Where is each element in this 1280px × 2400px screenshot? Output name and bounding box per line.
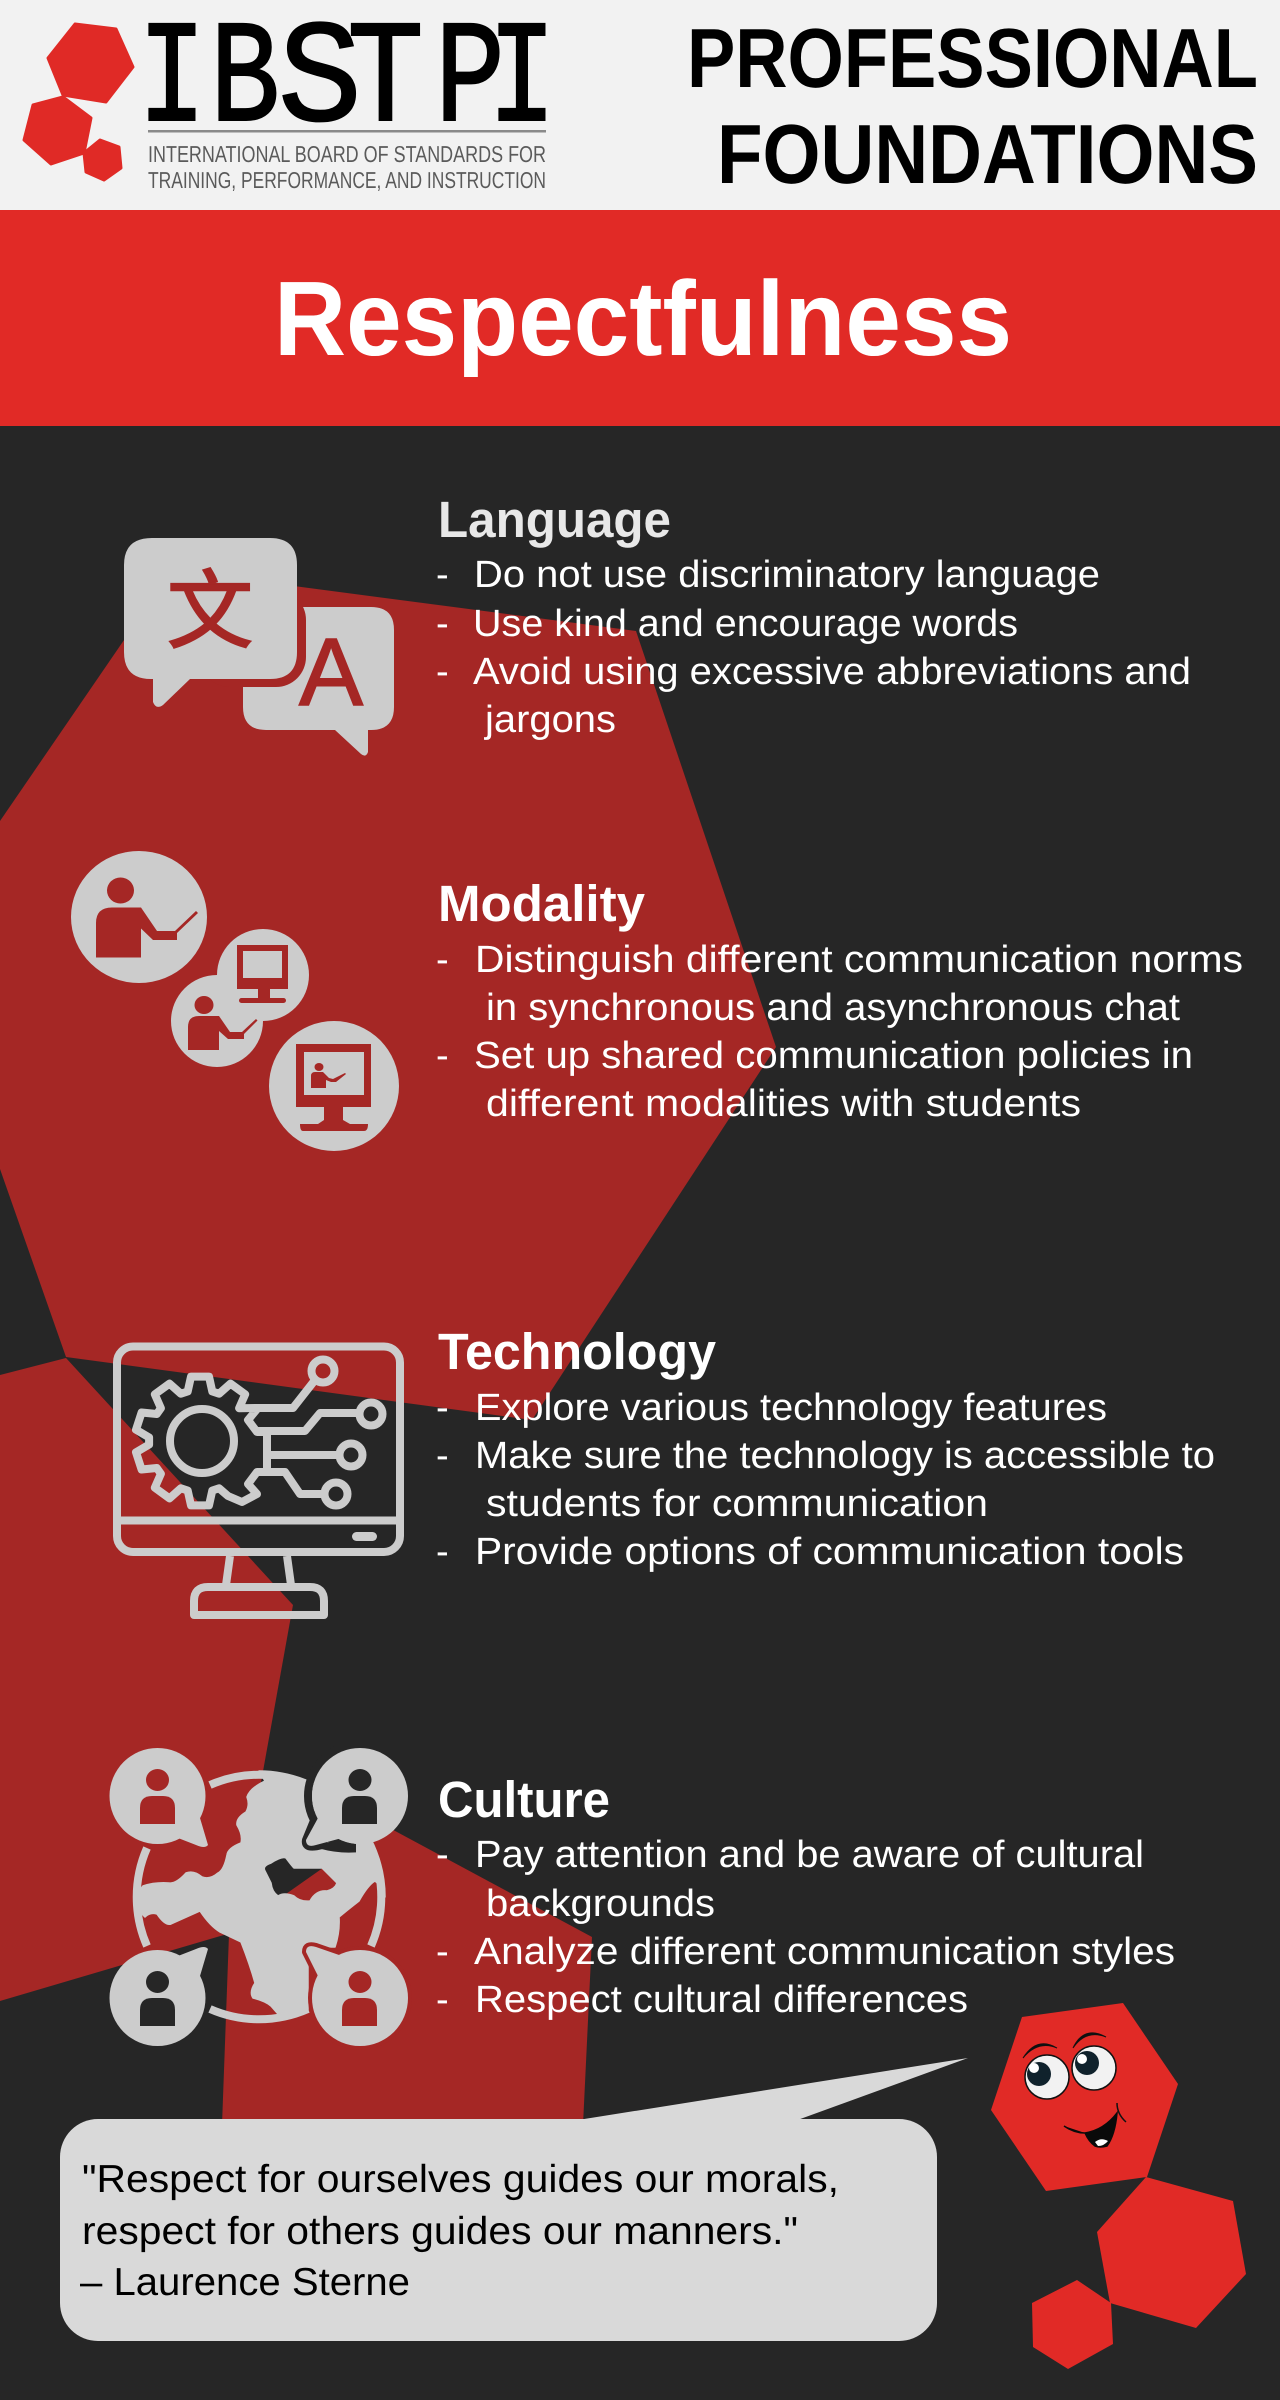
bullet list: -	[436, 1387, 449, 1429]
logo wordmark: I	[488, 0, 556, 164]
bullet list: backgrounds	[486, 1883, 715, 1925]
monitor	[237, 945, 288, 1003]
bullet list: Provide options of communication tools	[475, 1531, 1184, 1573]
series title	[687, 11, 1258, 201]
monitor	[117, 1346, 400, 1552]
icon: technology monitor with gear circuit	[117, 1346, 400, 1615]
bullet list: in synchronous and asynchronous chat	[486, 987, 1180, 1029]
globe ring	[137, 1775, 381, 2019]
bullet list: different modalities with students	[486, 1083, 1081, 1125]
mascot hexagons	[991, 2003, 1246, 2369]
bullet list: Analyze different communication styles	[474, 1931, 1175, 1973]
bullet list: -	[436, 554, 449, 596]
logo wordmark	[138, 0, 556, 164]
heading: Culture	[438, 1771, 610, 1828]
person bubble bottom left	[110, 1947, 208, 2046]
section: language	[436, 491, 1191, 741]
icon: language translation bubbles: A	[299, 619, 363, 726]
logo tagline	[148, 141, 546, 193]
bullet list: -	[436, 651, 449, 693]
mascot face	[1023, 2033, 1126, 2147]
bullet list: -	[436, 1931, 449, 1973]
quote text: – Laurence Sterne	[80, 2261, 410, 2304]
bullet list: Make sure the technology is accessible to	[475, 1435, 1215, 1477]
logo tagline: INTERNATIONAL BOARD OF STANDARDS FOR	[148, 141, 546, 167]
quote text: "Respect for ourselves guides our morals,	[82, 2158, 839, 2201]
section: modality	[436, 875, 1243, 1125]
main title: Respectfulness	[274, 260, 1012, 378]
person bubble bottom right	[306, 1946, 412, 2050]
circle backgrounds	[71, 851, 399, 1151]
logo wordmark: B	[210, 0, 280, 164]
logo tagline: TRAINING, PERFORMANCE, AND INSTRUCTION	[148, 167, 546, 193]
bullet list: Set up shared communication policies in	[474, 1035, 1193, 1077]
header band	[0, 0, 1280, 210]
heading: Technology	[438, 1323, 717, 1380]
quote text	[80, 2158, 839, 2304]
gear	[136, 1377, 267, 1505]
logo hexagons	[24, 24, 133, 180]
logo wordmark: S	[278, 0, 362, 164]
icon: globe with people	[110, 1744, 412, 2050]
bullet list: Respect cultural differences	[475, 1979, 968, 2021]
logo wordmark: T	[347, 0, 424, 164]
person bubble top left	[110, 1748, 208, 1847]
section: technology	[436, 1323, 1215, 1573]
bullet list: -	[436, 1834, 449, 1876]
logo wordmark: P	[435, 0, 505, 164]
person bubble top right	[306, 1744, 408, 1849]
small instructor	[188, 996, 258, 1050]
bullet list: -	[436, 1035, 449, 1077]
online instructor	[296, 1044, 371, 1131]
bullet list: Pay attention and be aware of cultural	[475, 1834, 1144, 1876]
bullet list: Use kind and encourage words	[473, 603, 1018, 645]
bullet list: jargons	[484, 699, 616, 741]
heading: Modality	[438, 875, 646, 932]
icon: language translation bubbles: 文	[167, 541, 253, 666]
logo wordmark: I	[138, 0, 206, 164]
mascot: hexagon character	[991, 2003, 1246, 2369]
instructor	[96, 878, 198, 958]
bullet list: -	[436, 939, 449, 981]
bullet list: students for communication	[486, 1483, 988, 1525]
icon: language translation bubbles	[124, 538, 394, 756]
bullet list: Avoid using excessive abbreviations and	[473, 651, 1191, 693]
bullet list: -	[436, 1531, 449, 1573]
bullet list: -	[436, 603, 449, 645]
section: culture	[436, 1771, 1175, 2021]
bullet list	[436, 554, 1191, 741]
bullet list: Explore various technology features	[475, 1387, 1107, 1429]
bullet list: Distinguish different communication norms	[475, 939, 1243, 981]
title band	[0, 210, 1280, 426]
icon: modality circles	[71, 851, 399, 1151]
bullet list: -	[436, 1435, 449, 1477]
heading: Language	[438, 491, 671, 548]
logo	[24, 0, 556, 193]
bullet list	[436, 1834, 1175, 2021]
globe land	[135, 1771, 385, 2014]
bullet list: Do not use discriminatory language	[474, 554, 1100, 596]
background hexagons	[0, 570, 776, 2125]
callout: quote speech bubble	[60, 2058, 968, 2341]
bullet list	[436, 939, 1243, 1125]
quote text: respect for others guides our manners."	[82, 2210, 798, 2253]
circuit lines	[257, 1380, 358, 1494]
bullet list: -	[436, 1979, 449, 2021]
bullet list	[436, 1387, 1215, 1573]
